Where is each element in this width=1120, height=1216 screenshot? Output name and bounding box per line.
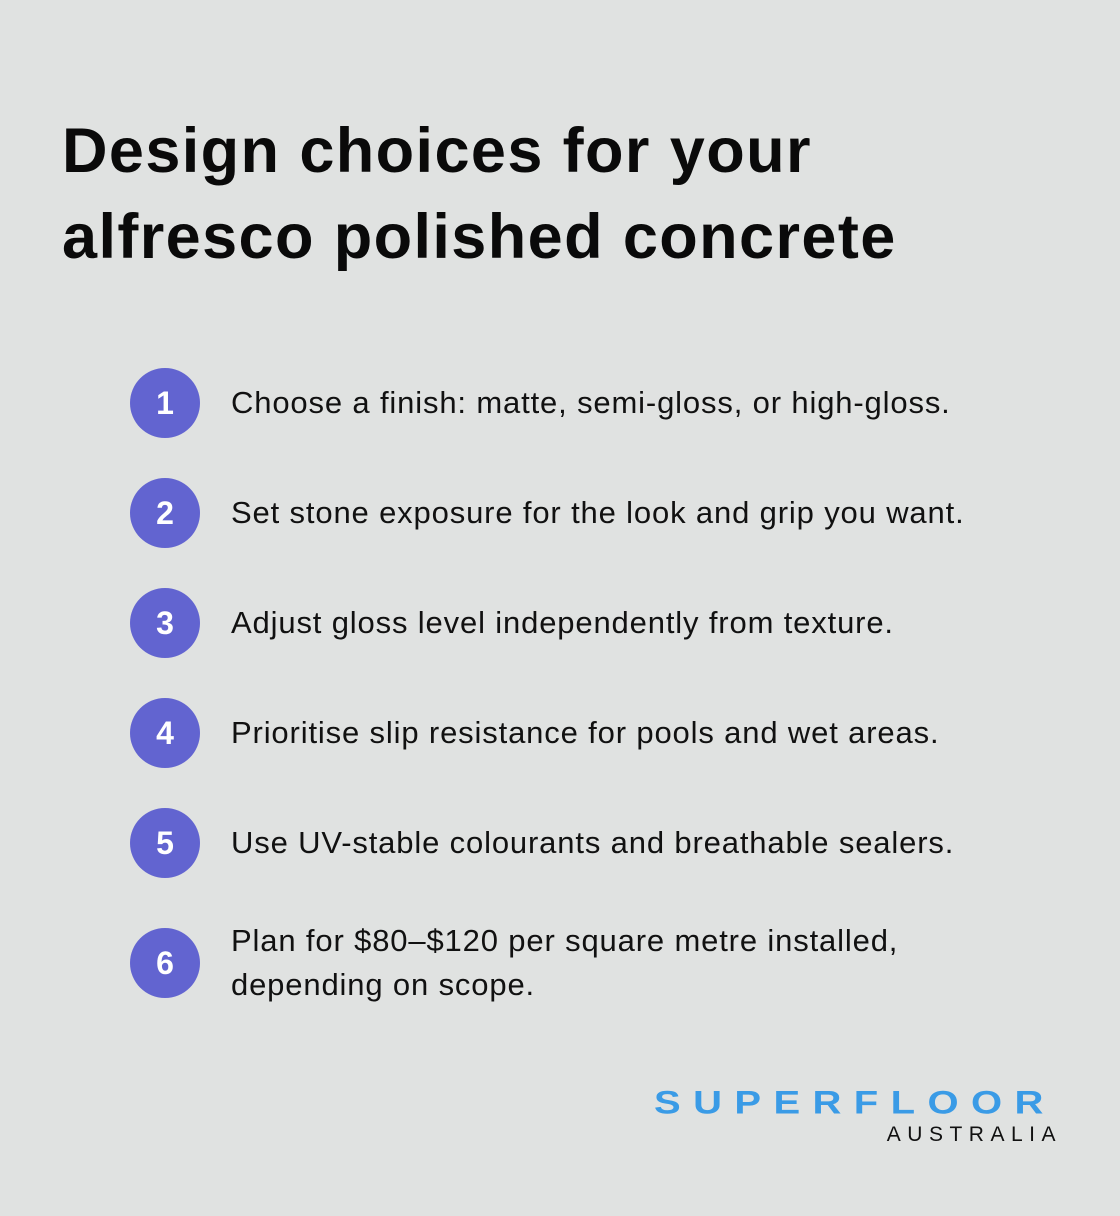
logo xyxy=(654,1086,1062,1146)
step 4: Prioritise slip resistance for pools and wet areas. xyxy=(231,715,939,750)
step 5 xyxy=(130,808,954,878)
title: alfresco polished concrete xyxy=(62,202,897,272)
step 3: Adjust gloss level independently from texture. xyxy=(231,605,894,640)
title xyxy=(62,116,897,272)
step 5: Use UV-stable colourants and breathable sealers. xyxy=(231,825,954,860)
step 3 xyxy=(130,588,894,658)
step 6: depending on scope. xyxy=(231,967,535,1002)
step 6 xyxy=(130,923,898,1002)
title: Design choices for your xyxy=(62,116,812,186)
step 5: 5 xyxy=(156,825,174,861)
step 3: 3 xyxy=(156,605,174,641)
step 6: 6 xyxy=(156,945,174,981)
step 2: Set stone exposure for the look and grip you want. xyxy=(231,495,965,530)
logo: SUPERFLOOR xyxy=(654,1086,1056,1121)
step 2: 2 xyxy=(156,495,174,531)
step 1: 1 xyxy=(156,385,174,421)
step 4: 4 xyxy=(156,715,174,751)
step 1: Choose a finish: matte, semi-gloss, or high-gloss. xyxy=(231,385,951,420)
step 1 xyxy=(130,368,951,438)
step 4 xyxy=(130,698,939,768)
step 6: Plan for $80–$120 per square metre installed, xyxy=(231,923,898,958)
step 2 xyxy=(130,478,965,548)
logo: AUSTRALIA xyxy=(887,1123,1062,1146)
